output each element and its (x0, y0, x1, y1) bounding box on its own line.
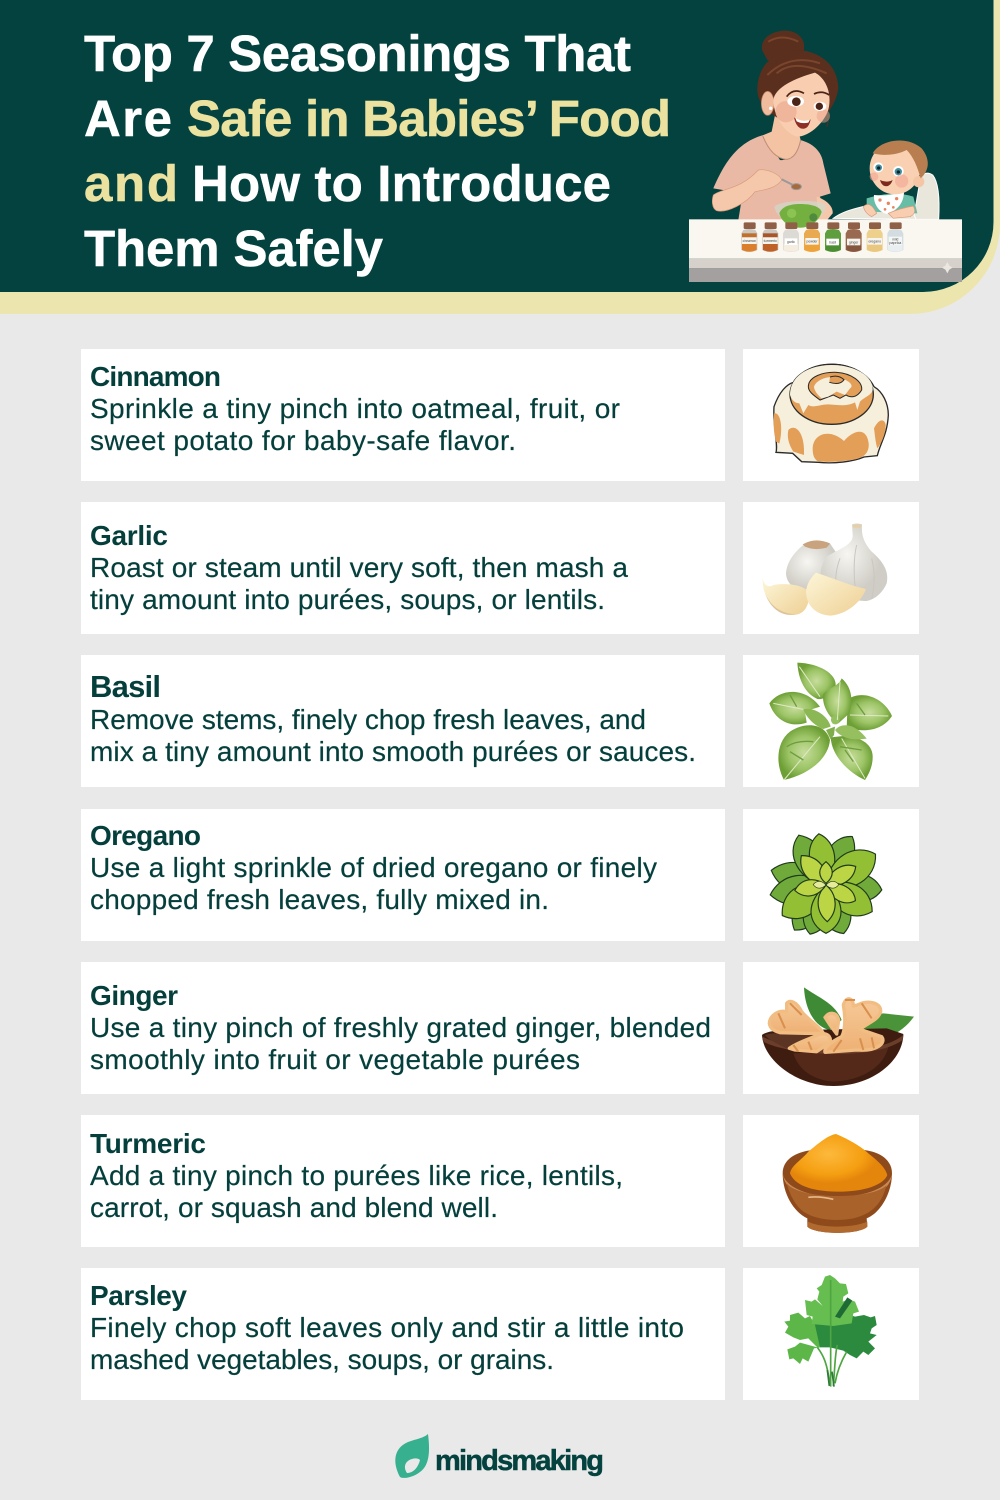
text: Cinnamon tip: Sprinkle a tiny pinch into oatmeal, fruit, or (90, 393, 620, 424)
icon: cinnamon roll (774, 364, 888, 463)
text: Parsley tip (90, 1312, 684, 1375)
baby (863, 140, 928, 218)
text: Oregano tip: Use a light sprinkle of dried oregano or finely (90, 852, 657, 883)
heading: Ginger: Ginger (90, 980, 178, 1011)
icon: basil (769, 663, 892, 780)
icon: turmeric bowl (783, 1134, 892, 1233)
text: Oregano tip: chopped fresh leaves, fully mixed in. (90, 884, 549, 915)
header banner (0, 0, 1000, 314)
text: Oregano tip (90, 852, 657, 915)
baby high chair (833, 173, 939, 219)
glass bowl of greens (774, 201, 826, 228)
counter (689, 219, 962, 282)
text: Turmeric tip: Add a tiny pinch to purées like rice, lentils, (90, 1160, 623, 1191)
icon: ginger in a bowl (762, 987, 914, 1086)
text: Garlic tip (90, 552, 628, 615)
row: Turmeric (81, 1115, 919, 1247)
row: Basil (81, 655, 919, 787)
row: Cinnamon (81, 349, 919, 481)
title: Top 7 Seasonings That (84, 25, 631, 82)
text: Turmeric tip (90, 1160, 623, 1223)
text: Cinnamon tip (90, 393, 620, 456)
title: and (84, 155, 178, 212)
icon: oregano (768, 829, 884, 938)
heading: Turmeric: Turmeric (90, 1128, 206, 1159)
heading: Parsley: Parsley (90, 1280, 187, 1311)
title: Safe in Babies’ Food (187, 90, 671, 147)
logo: mindsmaking (395, 1434, 604, 1478)
row: Garlic (81, 502, 919, 634)
mother's hair (757, 31, 838, 127)
text: Basil tip (90, 704, 696, 767)
title: How to Introduce (192, 155, 611, 212)
spice jars: ginger (849, 240, 859, 244)
title: Are (84, 90, 172, 147)
icon: leaf (395, 1434, 429, 1478)
text: Ginger tip (90, 1012, 711, 1075)
heading: Basil: Basil (90, 669, 161, 704)
spice jars: cinnamon (743, 239, 756, 243)
spice jars: powder (807, 240, 818, 244)
icon: garlic (763, 523, 887, 616)
heading: Cinnamon: Cinnamon (90, 361, 221, 392)
heading: Oregano: Oregano (90, 820, 201, 851)
spice jars: paprika (889, 241, 901, 245)
title: Them Safely (84, 220, 384, 277)
row: Ginger (81, 962, 919, 1094)
text: Basil tip: mix a tiny amount into smooth purées or sauces. (90, 736, 696, 767)
text: Ginger tip: Use a tiny pinch of freshly grated ginger, blended (90, 1012, 711, 1043)
mother's body (712, 115, 833, 223)
spice jars: garlic (787, 240, 795, 244)
mother's face (761, 73, 830, 137)
row: Oregano (81, 809, 919, 941)
spice jars: oregano (868, 240, 881, 244)
illustration: mother feeding baby with spice jars (689, 31, 962, 282)
heading: Garlic: Garlic (90, 520, 168, 551)
text: Parsley tip: mashed vegetables, soups, or grains. (90, 1344, 554, 1375)
row: Parsley (81, 1268, 919, 1400)
icon: parsley (784, 1275, 877, 1387)
text: Ginger tip: smoothly into fruit or vegetable purées (90, 1044, 580, 1075)
text: Turmeric tip: carrot, or squash and blend well. (90, 1192, 498, 1223)
text: Garlic tip: tiny amount into purées, soups, or lentils. (90, 584, 605, 615)
title (84, 25, 671, 277)
text: Garlic tip: Roast or steam until very soft, then mash a (90, 552, 628, 583)
spice jars: mild (892, 237, 899, 241)
spice jars: turmeric (764, 239, 777, 243)
text: Basil tip: Remove stems, finely chop fresh leaves, and (90, 704, 646, 735)
text: Parsley tip: Finely chop soft leaves only and stir a little into (90, 1312, 684, 1343)
wordmark: mindsmaking (435, 1445, 604, 1477)
text: Cinnamon tip: sweet potato for baby-safe flavor. (90, 425, 516, 456)
spice jars: basil (829, 240, 836, 244)
spice jars (741, 222, 903, 252)
